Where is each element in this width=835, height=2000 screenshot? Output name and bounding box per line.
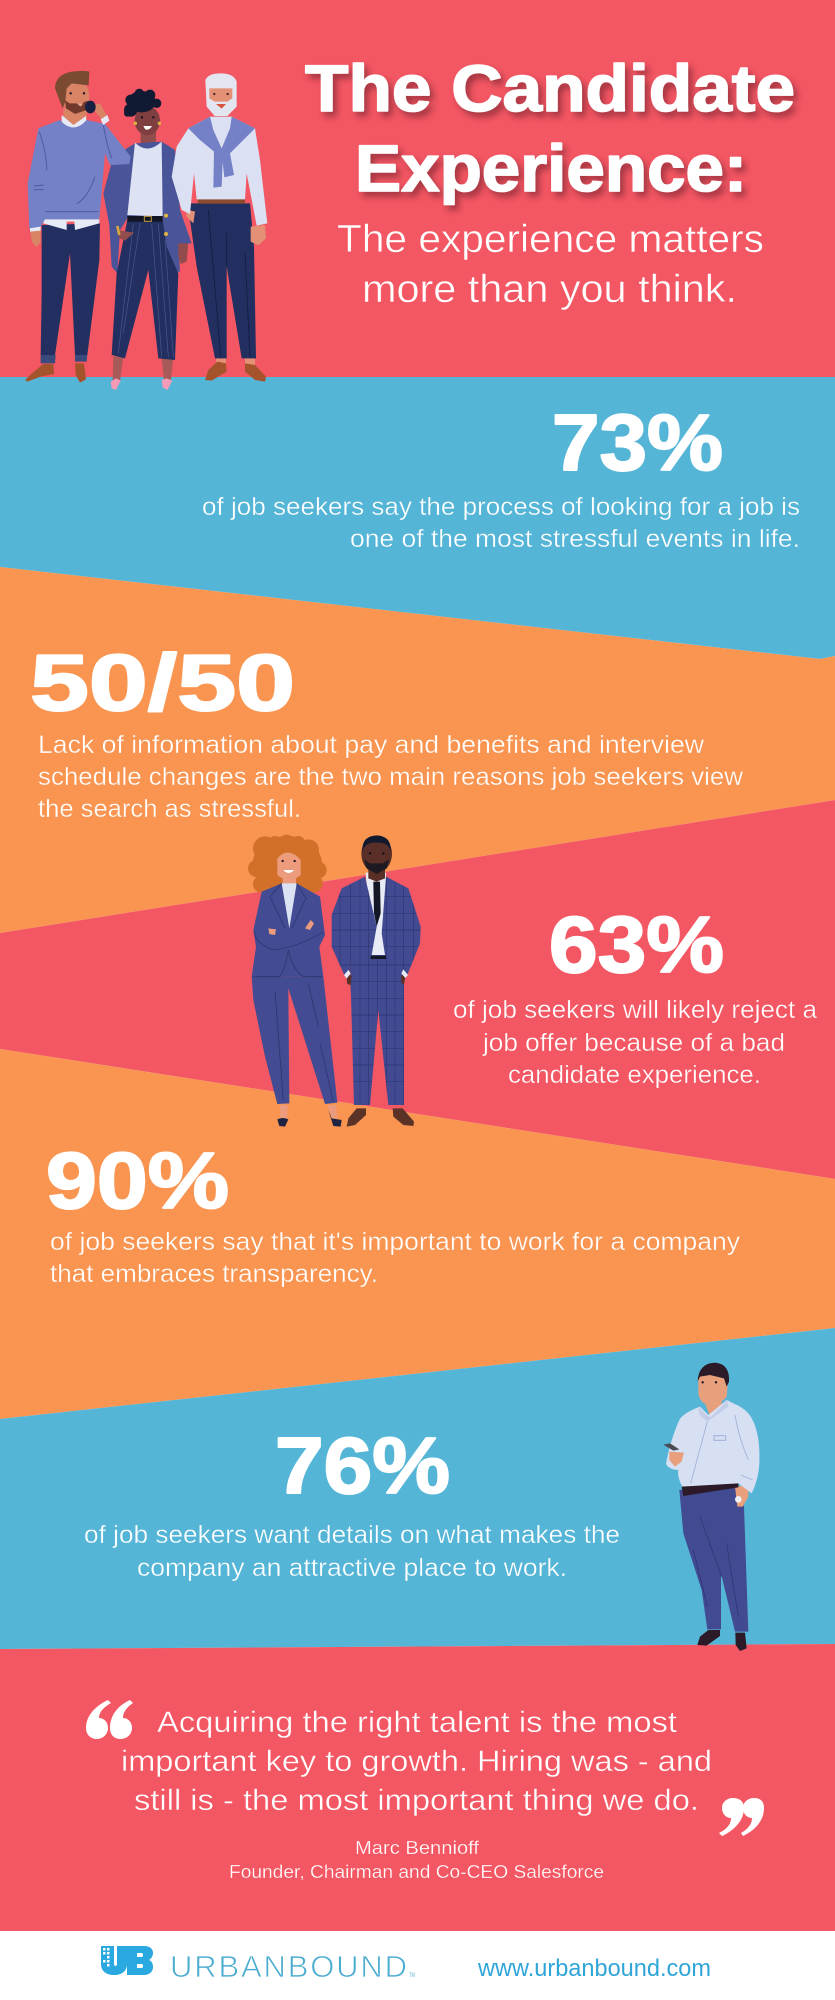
stat number 76%: 76% [275, 1421, 450, 1510]
icon: opening quote mark [86, 1700, 133, 1739]
stat description: of job seekers want details on what makes the [84, 1521, 620, 1549]
figure: woman in navy blazer [103, 89, 192, 390]
panel: 50/50 stat [0, 567, 835, 933]
icon: UB mark [101, 1946, 153, 1975]
figure: curly-haired woman in suit [248, 835, 342, 1127]
attribution: Founder, Chairman and Co-CEO Salesforce [229, 1861, 604, 1882]
stat description: of job seekers say that it's important to work for a company [50, 1228, 741, 1256]
figure: man in plaid suit [332, 835, 421, 1127]
quote text: Acquiring the right talent is the most [157, 1706, 678, 1739]
panel: 73% stat [0, 377, 835, 659]
stat description: schedule changes are the two main reasons job seekers view [38, 763, 744, 791]
stat description: Lack of information about pay and benefits and interview [38, 731, 705, 759]
stat description [453, 996, 817, 1089]
wordmark: URBANBOUND [170, 1949, 407, 1984]
stat description [38, 731, 744, 823]
subtitle: more than you think. [362, 268, 737, 311]
blue band [0, 1328, 835, 1649]
red band [0, 1644, 835, 1931]
panel: 76% stat [0, 1328, 835, 1649]
stat number 63%: 63% [549, 900, 724, 989]
white footer strip [0, 1931, 835, 2000]
orange band [0, 567, 835, 933]
quote text: important key to growth. Hiring was - and [121, 1745, 712, 1778]
title [305, 51, 795, 205]
stat description [202, 493, 800, 553]
orange band [0, 1049, 835, 1419]
panel: header [0, 0, 835, 378]
stat description: one of the most stressful events in life. [350, 525, 800, 553]
illustration: three colleagues [25, 71, 267, 390]
icon: closing quote mark [719, 1798, 764, 1836]
blue band [0, 377, 835, 659]
red band [0, 800, 835, 1179]
stat description: the search as stressful. [38, 795, 301, 823]
stat description: company an attractive place to work. [137, 1554, 567, 1582]
stat description [84, 1521, 620, 1582]
panel: 63% stat [0, 800, 835, 1179]
title: Experience: [355, 131, 747, 205]
illustration: two professionals in suits [248, 835, 427, 1127]
attribution: Marc Bennioff [355, 1837, 480, 1858]
website url: www.urbanbound.com [477, 1955, 711, 1982]
stat description: that embraces transparency. [50, 1260, 378, 1288]
logo: UrbanBound [101, 1946, 415, 1984]
quote text: still is - the most important thing we do. [134, 1784, 699, 1817]
figure: older man with tied sweater [172, 73, 267, 382]
trademark: TM [409, 1973, 415, 1979]
title: The Candidate [305, 51, 795, 125]
header background [0, 0, 835, 378]
panel: quote [0, 1644, 835, 1931]
panel: footer [0, 1931, 835, 2000]
stat description: job offer because of a bad [482, 1029, 785, 1057]
stat description: of job seekers say the process of looking for a job is [202, 493, 800, 521]
stat description: candidate experience. [508, 1061, 761, 1089]
subtitle: The experience matters [337, 218, 764, 261]
stat number 73%: 73% [552, 398, 723, 487]
quote text [121, 1706, 712, 1817]
stat number 50/50: 50/50 [30, 638, 295, 727]
illustration: man with phone [663, 1363, 759, 1651]
panel: 90% stat [0, 1049, 835, 1419]
stat description: of job seekers will likely reject a [453, 996, 817, 1024]
figure: man with beard on phone [25, 71, 131, 383]
stat description [50, 1228, 741, 1288]
attribution [229, 1837, 604, 1882]
subtitle [337, 218, 764, 311]
stat number 90%: 90% [46, 1136, 229, 1225]
